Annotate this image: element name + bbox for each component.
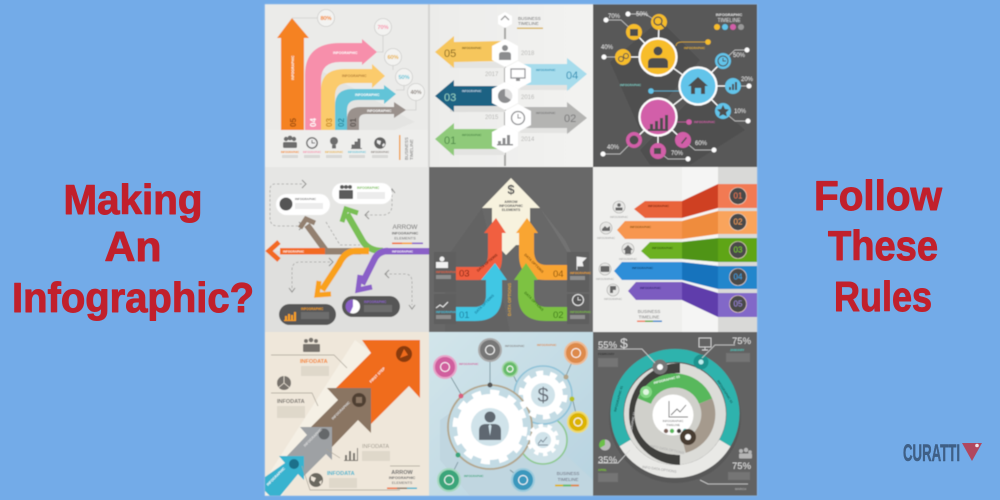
ribbon 03 xyxy=(641,238,757,262)
percentages: 75% xyxy=(732,461,752,472)
ring labels: INFOGRAPHIC 01 xyxy=(716,379,734,404)
arrow labels: INFOGRAPHIC xyxy=(367,109,392,113)
arrow captions: INFOGRAPHIC xyxy=(303,427,323,448)
bottom icon row: INFOGRAPHIC xyxy=(348,150,366,154)
panel: branching arrows xyxy=(265,167,429,332)
arrow numbers xyxy=(444,48,578,147)
percentages: 60% xyxy=(695,141,708,147)
month labels xyxy=(598,348,746,491)
arrow labels xyxy=(291,51,392,113)
yellow nodes xyxy=(615,14,711,76)
arrow labels: INFOGRAPHIC xyxy=(355,93,380,97)
panel: gears xyxy=(429,332,593,496)
title: BUSINESS xyxy=(518,16,541,21)
badge numbers: 04 xyxy=(734,272,743,282)
percentages: 10% xyxy=(734,109,747,115)
arrow 01 xyxy=(456,263,507,321)
percentages: 40% xyxy=(607,145,620,151)
percentages: 55% xyxy=(598,340,618,351)
panel: hexagon timeline xyxy=(428,4,593,167)
years: 2016 xyxy=(521,95,535,101)
globe icon xyxy=(309,473,323,487)
arrow 01 xyxy=(435,123,505,156)
pill: globe: INFOGRAPHIC xyxy=(295,197,317,201)
arrow: orange step xyxy=(336,340,420,424)
panel: dollar arrows: INFOGRAPHIC xyxy=(499,204,523,208)
percentages xyxy=(601,12,754,157)
title xyxy=(392,224,419,240)
ribbon captions xyxy=(630,204,674,290)
arrow captions xyxy=(462,46,556,137)
arrow numbers xyxy=(459,268,564,321)
block captions: INFOGRAPHIC xyxy=(570,310,592,314)
percentage bubbles: 80% xyxy=(320,16,332,22)
arrow 04 xyxy=(517,58,587,91)
arrow labels: INFOGRAPHIC xyxy=(291,55,295,80)
arrow captions: INFOGRAPHIC xyxy=(462,133,482,137)
years: 2014 xyxy=(521,137,535,143)
vertical label: DATA OPTIONS xyxy=(507,283,512,316)
pill: pie xyxy=(342,296,400,317)
panel: dollar arrows: ARROW xyxy=(504,200,518,204)
arrow captions: FIRST STEP xyxy=(369,366,386,384)
rotated business timeline: BUSINESS xyxy=(404,137,409,160)
ribbon 04 xyxy=(614,262,757,289)
month labels: JANUARY xyxy=(730,348,744,352)
arrow captions xyxy=(266,366,386,487)
left headline: An xyxy=(104,223,162,270)
infodata labels: INFODATA xyxy=(277,399,305,405)
title: TIMELINE xyxy=(717,18,741,24)
captions: INFOGRAPHIC xyxy=(694,120,716,124)
side icon captions xyxy=(596,215,637,301)
arrow captions: INFOGRAPHIC xyxy=(536,68,556,72)
node captions: INFOGRAPHIC xyxy=(537,343,557,347)
badge numbers: 01 xyxy=(734,192,743,200)
pill: people xyxy=(332,183,392,204)
infodata labels: INFODATA xyxy=(300,359,328,365)
leader lines xyxy=(603,14,749,159)
arrow: orange xyxy=(277,18,309,130)
centre legend dots xyxy=(664,429,687,433)
title: TIMELINE xyxy=(558,477,578,482)
side icons xyxy=(599,201,634,296)
ring junction dots xyxy=(456,374,574,458)
infodata labels: INFODATA xyxy=(327,471,355,477)
main band xyxy=(269,242,429,260)
arrow numbers: 02 xyxy=(553,310,564,321)
title xyxy=(518,16,541,26)
title xyxy=(638,309,660,320)
title: TIMELINE xyxy=(639,314,659,320)
arrow 02 xyxy=(514,263,567,321)
colour bar xyxy=(387,488,417,489)
legend dots xyxy=(714,24,744,30)
left headline xyxy=(12,176,254,321)
arrow: blue xyxy=(335,85,396,130)
percentages: 70% xyxy=(671,151,684,157)
captions: INFOGRAPHIC xyxy=(620,83,642,87)
arrow: grey xyxy=(347,102,406,130)
arrow captions: INFOGRAPHIC xyxy=(462,46,482,50)
pill: bars: INFOGRAPHIC xyxy=(301,307,324,311)
band captions: INFOGRAPHIC xyxy=(392,250,414,254)
percentages: 70% xyxy=(608,14,621,20)
arrow numbers: 04 xyxy=(553,269,564,280)
inner ring xyxy=(644,380,708,446)
bottom icon row: INFOGRAPHIC xyxy=(325,150,343,154)
ring labels: INFOGRAPHIC 02 xyxy=(628,411,636,437)
left headline: Infographic? xyxy=(12,274,254,321)
arrow captions: INFOGRAPHIC xyxy=(462,89,482,93)
arrow 04 xyxy=(516,218,567,280)
arrow labels: INFOGRAPHIC xyxy=(333,51,358,55)
dollar icon: $ xyxy=(620,335,628,351)
bottom icon row xyxy=(281,136,389,158)
title xyxy=(716,13,743,24)
captions: INFOGRAPHIC xyxy=(684,46,706,50)
branch: purple xyxy=(362,251,388,284)
panel dividers xyxy=(264,4,758,496)
side icon captions: INFOGRAPHIC xyxy=(619,257,637,261)
title: BUSINESS xyxy=(557,471,579,476)
centre disc xyxy=(652,394,694,436)
icon blocks xyxy=(434,252,456,292)
percentage bubbles: 50% xyxy=(398,75,410,81)
arrow numbers: 01 xyxy=(444,135,456,147)
dollar gear: $ xyxy=(537,385,549,407)
bottom icon row: INFOGRAPHIC xyxy=(281,150,299,154)
title: BUSINESS xyxy=(638,309,660,314)
left icons xyxy=(436,256,448,308)
arrow: yellow xyxy=(321,64,385,130)
right headline: These xyxy=(828,222,938,269)
infodata labels: INFODATA xyxy=(362,444,389,450)
cream house arrow xyxy=(482,178,540,255)
percentage bubbles: 60% xyxy=(387,55,399,61)
hexagon icons xyxy=(497,16,525,146)
arrow numbers: 02 xyxy=(337,118,346,127)
arrow numbers: 05 xyxy=(444,48,456,60)
big gear xyxy=(456,392,524,462)
ring labels: INFOGRAPHIC 03 xyxy=(653,375,680,385)
bars icon xyxy=(344,448,358,461)
monitor icon xyxy=(699,338,711,350)
bottom icon row: INFOGRAPHIC xyxy=(371,150,389,154)
band captions: INFOGRAPHIC xyxy=(283,250,305,254)
pill: pie: INFOGRAPHIC xyxy=(364,300,387,304)
colour bar xyxy=(517,28,543,29)
title xyxy=(389,470,416,485)
arrow numbers: 03 xyxy=(444,92,456,104)
left headline: Making xyxy=(64,176,202,223)
ring labels: INFO DATA OPTIONS xyxy=(642,465,677,474)
arrow: grey step xyxy=(287,427,332,476)
arrow 02 xyxy=(517,102,587,134)
years xyxy=(485,51,535,143)
percentages: 35% xyxy=(598,455,618,466)
title: INFOGRAPHIC xyxy=(716,13,743,17)
people icon xyxy=(303,338,320,352)
title: INFOGRAPHIC xyxy=(392,232,419,236)
arrow: pink xyxy=(305,39,377,130)
arrow captions: DATA OPTIONS xyxy=(474,293,495,315)
node captions: INFOGRAPHIC xyxy=(459,362,479,366)
pill: bars xyxy=(279,304,336,325)
arrow captions: DATA OPTIONS xyxy=(523,253,545,274)
middle ring xyxy=(624,363,726,465)
month labels: MARCH xyxy=(735,487,746,491)
blue nodes xyxy=(648,53,741,119)
panel: dollar arrows: $ xyxy=(507,182,515,197)
arrow numbers: 01 xyxy=(349,118,358,127)
pink nodes xyxy=(626,98,692,159)
connectors xyxy=(445,350,578,480)
infodata labels xyxy=(277,359,389,477)
leader lines xyxy=(598,345,748,484)
title: ELEMENTS xyxy=(394,236,416,240)
percentages: 20% xyxy=(741,77,754,83)
percentage bubbles: 70% xyxy=(377,25,389,31)
title: ARROW xyxy=(393,224,418,231)
arrow labels: INFOGRAPHIC xyxy=(342,74,367,78)
badge numbers xyxy=(734,192,743,308)
outer ring xyxy=(617,355,733,471)
years: 2017 xyxy=(485,72,499,78)
ribbon 02 xyxy=(617,211,757,239)
badge numbers: 05 xyxy=(734,300,743,308)
pie icon xyxy=(277,376,291,390)
dashed arrowheads xyxy=(289,180,415,309)
node captions xyxy=(459,343,557,478)
panel: rising arrows xyxy=(265,4,429,167)
arrow numbers: 04 xyxy=(309,118,318,127)
pill: globe xyxy=(276,194,330,215)
ribbon captions: INFOGRAPHIC xyxy=(640,286,662,290)
block captions: INFOGRAPHIC xyxy=(436,310,458,314)
title: ARROW xyxy=(391,470,413,476)
arrow numbers: 05 xyxy=(289,118,298,127)
ribbon captions: INFOGRAPHIC xyxy=(652,246,674,250)
centre disc: INFOGRAPHIC xyxy=(663,419,684,423)
branch: orange xyxy=(322,251,369,290)
title xyxy=(557,471,579,482)
small gear green ring xyxy=(519,416,567,464)
rotated business timeline: TIMELINE xyxy=(409,139,414,160)
colour bar xyxy=(637,320,662,322)
ring labels xyxy=(613,375,734,474)
block captions: INFOGRAPHIC xyxy=(570,271,592,275)
arrow captions: INFOGRAPHIC xyxy=(331,400,351,421)
arrow: blue step xyxy=(265,456,304,496)
dollar gear xyxy=(521,373,565,417)
side icon captions: INFOGRAPHIC xyxy=(604,297,622,301)
arrow captions: DATA OPTIONS xyxy=(523,291,545,312)
branch: green xyxy=(347,214,383,251)
title: TIMELINE xyxy=(518,21,539,26)
percentages: 40% xyxy=(601,45,614,51)
right icons xyxy=(572,257,586,306)
percentage bubbles: 40% xyxy=(410,90,422,96)
node captions: INFOGRAPHIC xyxy=(464,474,484,478)
ribbon 05 xyxy=(628,282,757,317)
side icon captions: INFOGRAPHIC xyxy=(610,215,628,219)
month labels: APRIL xyxy=(598,468,607,472)
panel: ribbon tabs xyxy=(593,167,757,332)
arrow 03 xyxy=(435,80,505,112)
bottom icon row: INFOGRAPHIC xyxy=(303,150,321,154)
arrow numbers: 01 xyxy=(459,310,470,321)
arrow 03 xyxy=(456,218,506,280)
title: ELEMENTS xyxy=(392,481,413,485)
panel: diagonal arrows xyxy=(265,332,429,496)
right headline: Rules xyxy=(834,273,932,320)
ring labels: INFOGRAPHIC 01 xyxy=(613,385,624,412)
years: 2015 xyxy=(485,115,499,121)
arrow: brown step xyxy=(311,388,371,447)
white terminal dots xyxy=(600,12,752,162)
ribbon 01 xyxy=(634,184,757,218)
small gear xyxy=(528,426,558,454)
arrow captions: INFOGRAPHIC xyxy=(266,466,286,487)
node captions: INFOGRAPHIC xyxy=(505,344,525,348)
ring markers xyxy=(640,354,708,445)
arrow numbers: 04 xyxy=(566,70,578,82)
dashed paths xyxy=(270,184,412,305)
people icon xyxy=(739,448,752,458)
block text xyxy=(436,275,585,319)
ribbon captions: INFOGRAPHIC xyxy=(630,225,652,229)
dollar gear blue ring xyxy=(514,366,572,424)
ribbon captions: INFOGRAPHIC xyxy=(632,266,654,270)
arrow captions: DATA OPTIONS xyxy=(476,253,499,273)
ring labels: INFO DATA OPTIONS xyxy=(650,444,685,455)
node icons xyxy=(618,17,737,154)
arrow 05 xyxy=(435,36,505,68)
arrow badges xyxy=(289,346,412,469)
captions xyxy=(620,46,716,124)
ribbon captions: INFOGRAPHIC xyxy=(648,204,670,208)
percentages: 50% xyxy=(636,12,649,18)
big gear ring xyxy=(448,385,532,469)
side icon captions: INFOGRAPHIC xyxy=(597,236,615,240)
block captions: INFOGRAPHIC xyxy=(436,270,458,274)
month labels: FEBRUARY xyxy=(598,352,615,356)
arrow numbers: 03 xyxy=(459,268,470,280)
pill: people: INFOGRAPHIC xyxy=(357,186,380,190)
rotated business timeline xyxy=(399,135,414,160)
badge numbers: 02 xyxy=(734,218,743,226)
timeline nodes xyxy=(434,339,588,491)
pie icon xyxy=(599,439,610,450)
text blocks xyxy=(598,353,750,482)
arrow captions xyxy=(474,253,545,315)
panel: circular chart xyxy=(593,332,757,496)
badge numbers: 03 xyxy=(734,246,743,254)
panel: dark network xyxy=(593,4,757,167)
arrow numbers xyxy=(289,118,358,127)
number badges xyxy=(730,188,746,312)
right headline: Follow xyxy=(814,172,942,219)
block captions xyxy=(436,270,592,314)
percentage bubbles xyxy=(292,10,424,110)
colour bar xyxy=(392,242,423,244)
percentages: 50% xyxy=(733,53,746,59)
arrow captions: INFOGRAPHIC xyxy=(536,111,556,115)
leader lines xyxy=(271,355,420,490)
right headline xyxy=(814,172,942,320)
arrow numbers: 02 xyxy=(564,113,576,125)
years: 2018 xyxy=(521,51,535,57)
panel: dollar arrows xyxy=(429,167,593,332)
arrow numbers: 03 xyxy=(325,118,334,127)
side icon captions: INFOGRAPHIC xyxy=(596,277,614,281)
band captions xyxy=(283,250,414,254)
side icon glyphs xyxy=(600,203,633,293)
percentages: 75% xyxy=(732,336,752,347)
percentages xyxy=(598,336,752,472)
branch: brown xyxy=(307,225,326,251)
infographic mosaic xyxy=(264,4,758,496)
connectors xyxy=(623,22,733,151)
title: INFOGRAPHIC xyxy=(389,476,416,480)
text blocks xyxy=(277,366,390,488)
hexagon nodes xyxy=(492,12,531,153)
panel: dollar arrows: ELEMENTS xyxy=(502,208,521,212)
centre disc: TIMELINE xyxy=(666,423,680,427)
colour bar xyxy=(555,484,579,486)
